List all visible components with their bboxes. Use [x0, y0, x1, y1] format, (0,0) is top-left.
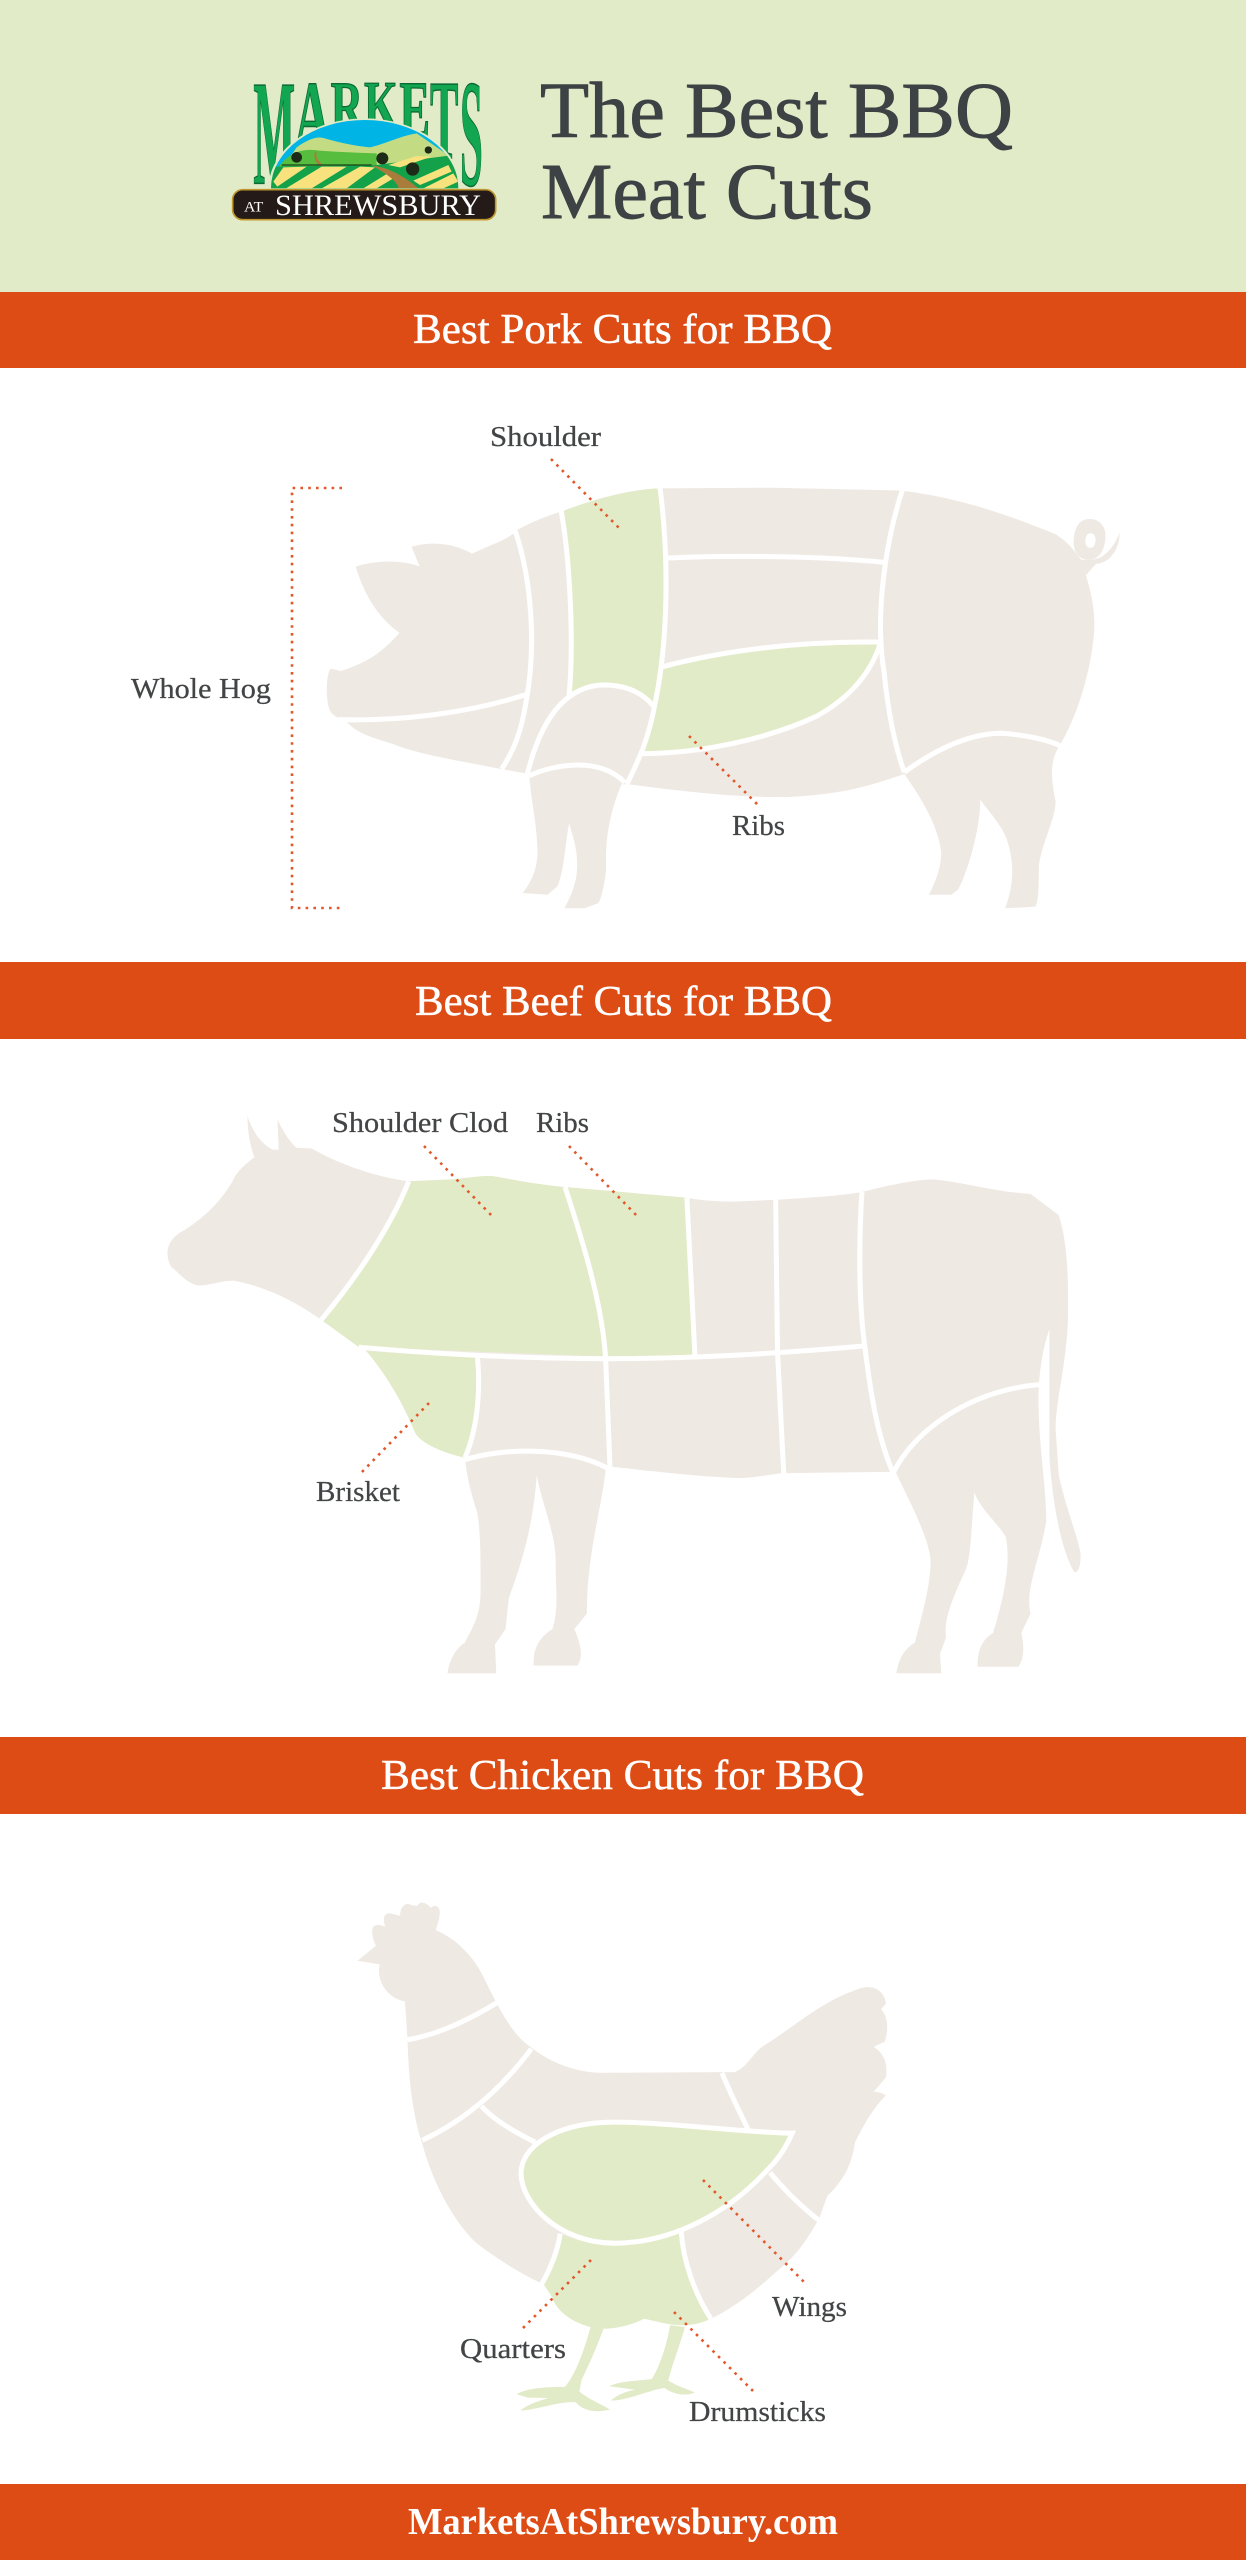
pig tail curl: [1081, 533, 1120, 575]
label: Ribs: Ribs: [536, 1108, 589, 1139]
label: Wings: Wings: [772, 2292, 847, 2323]
chicken diagram: [358, 1903, 887, 2411]
section banner: pork: Best Pork Cuts for BBQ: [413, 307, 832, 353]
pig silhouette: [327, 488, 1094, 908]
left leg: [517, 2327, 610, 2411]
highlighted cut: quarters and drumsticks: [517, 2232, 711, 2411]
right leg: [609, 2325, 695, 2401]
section banner: beef: [0, 962, 1246, 1039]
whole hog bracket: [292, 488, 342, 908]
pork diagram: [327, 488, 1120, 908]
section banner: chicken: Best Chicken Cuts for BBQ: [381, 1753, 864, 1799]
logo: Markets at Shrewsbury: [232, 82, 496, 220]
logo wordmark: E: [399, 67, 430, 155]
logo banner: SHREWSBURY: [275, 189, 481, 222]
logo landscape dome: [267, 117, 467, 190]
beef ribs leader line: [569, 1146, 638, 1217]
title: [540, 68, 1013, 236]
label: Quarters: Quarters: [460, 2334, 566, 2365]
footer banner: [0, 2484, 1246, 2560]
footer banner: MarketsAtShrewsbury.com: [408, 2501, 838, 2543]
label: Shoulder Clod: Shoulder Clod: [332, 1108, 508, 1139]
shoulder leader line: [551, 459, 622, 531]
title: Meat Cuts: [541, 149, 873, 236]
section banner: beef: Best Beef Cuts for BBQ: [415, 979, 832, 1025]
beef diagram: [168, 1116, 1081, 1673]
pig cut lines: [339, 488, 1061, 784]
logo wordmark: T: [430, 58, 458, 183]
label: Brisket: Brisket: [316, 1477, 400, 1508]
logo wordmark: [253, 49, 483, 219]
cow silhouette: [168, 1116, 1081, 1673]
pig tail: [1074, 519, 1106, 560]
highlighted cut: ribs: [565, 1187, 695, 1356]
highlighted cut: ribs: [642, 642, 881, 754]
section banner: pork: [0, 292, 1246, 368]
highlighted cut: shoulder clod: [321, 1176, 606, 1356]
title: The Best BBQ: [540, 68, 1013, 155]
logo banner: AT: [244, 199, 263, 215]
brisket leader line: [361, 1403, 429, 1473]
label: Ribs: Ribs: [732, 811, 785, 842]
logo wordmark: K: [364, 69, 398, 144]
highlighted cut: wing: [521, 2122, 792, 2243]
header panel: [0, 0, 1246, 292]
section banner: chicken: [0, 1737, 1246, 1814]
label: Shoulder: Shoulder: [490, 422, 602, 453]
cow cut lines: [321, 1181, 1040, 1474]
wings leader line: [703, 2180, 807, 2285]
highlighted cut: shoulder: [564, 488, 666, 703]
logo wordmark: A: [294, 62, 330, 169]
label: Drumsticks: Drumsticks: [689, 2397, 826, 2428]
logo wordmark: M: [253, 49, 295, 216]
ribs leader line: [689, 736, 760, 807]
quarters leader line: [522, 2260, 591, 2329]
chicken cut lines: [407, 2002, 819, 2319]
highlighted cut: brisket: [366, 1351, 479, 1458]
drumsticks leader line: [674, 2312, 753, 2391]
shoulder clod leader line: [424, 1146, 493, 1217]
logo wordmark: R: [331, 67, 364, 146]
logo wordmark: S: [460, 50, 483, 219]
chicken silhouette: [358, 1903, 887, 2323]
label: Whole Hog: Whole Hog: [131, 674, 271, 705]
